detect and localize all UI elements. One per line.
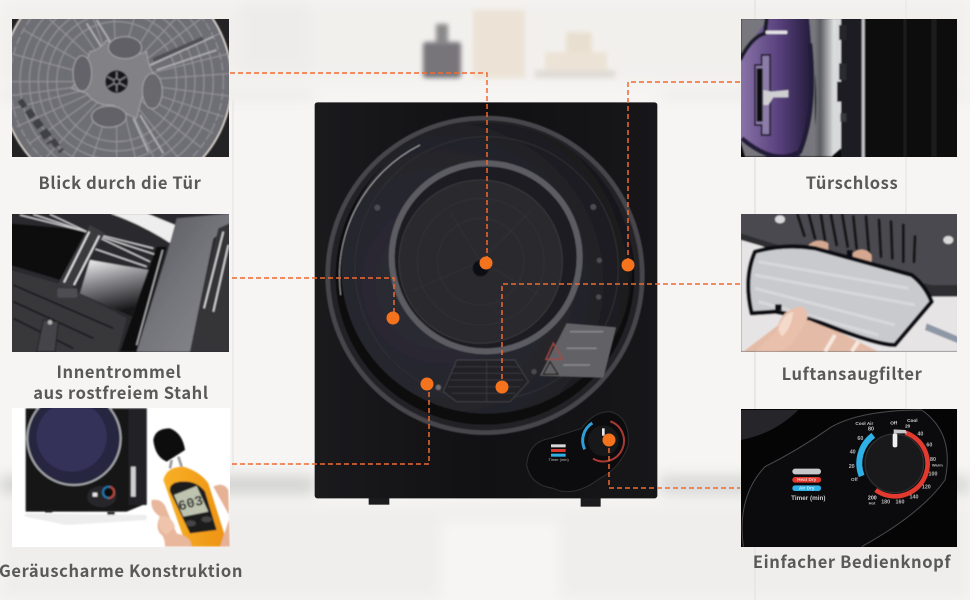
- vent grille: [443, 360, 528, 402]
- photo: control knob close-up: Heat Dry: [797, 477, 817, 482]
- label: Geräuscharme Konstruktion: Geräuscharme Konstruktion: [0, 558, 243, 582]
- warning sticker: [540, 323, 616, 378]
- photo: control knob close-up: 160: [896, 499, 904, 505]
- label: Blick durch die Tür: Blick durch die Tür: [39, 170, 202, 194]
- photo: control knob close-up: Hot: [869, 500, 876, 505]
- photo: control knob close-up: Warm: [932, 463, 943, 468]
- photo: stainless steel drum: [10, 213, 233, 355]
- photo: control knob close-up: 120: [922, 485, 931, 491]
- panel: Geräuscharme Konstruktion: [0, 408, 242, 577]
- leader line: door view: [230, 73, 487, 263]
- photo: door lock: [740, 18, 958, 158]
- photo: control knob close-up: Cool: [907, 418, 918, 423]
- photo: control knob close-up: Cool Air: [855, 421, 873, 426]
- dryer product image: [315, 102, 657, 507]
- orange marker dots: [386, 256, 634, 446]
- panel: Innentrommel aus rostfreiem Stahl: [10, 213, 233, 404]
- leader line: control knob: [609, 440, 740, 488]
- photo: control knob close-up: Off: [851, 477, 858, 482]
- photo: control knob close-up: 20: [849, 464, 855, 470]
- photo: control knob close-up: 180: [881, 499, 890, 505]
- panel: Blick durch die Tür: [12, 19, 229, 189]
- red timer arc: [876, 433, 928, 496]
- photo: drum seen through the door: [12, 19, 229, 157]
- panel: Türschloss: [740, 18, 958, 194]
- photo: control knob close-up: 60: [857, 436, 863, 442]
- photo: control knob close-up: [741, 409, 957, 547]
- panel: Luftansaugfilter: [741, 213, 958, 385]
- dryer body: [315, 102, 657, 498]
- photo: control knob close-up: 60: [926, 443, 932, 449]
- label: Innentrommel aus rostfreiem Stahl: [33, 359, 209, 404]
- inner drum window: [392, 163, 580, 351]
- blue timer arc: [859, 435, 873, 476]
- label: Innentrommel aus rostfreiem Stahl: Innentrommel: [56, 359, 182, 383]
- photo: control knob close-up: 40: [917, 431, 923, 437]
- photo: control knob close-up: 80: [930, 457, 936, 463]
- photo: air intake filter: [741, 213, 958, 352]
- photo: control knob close-up: 80: [868, 427, 874, 433]
- dryer feet: [369, 497, 601, 507]
- photo: dryer and sound level meter: 603: [177, 493, 205, 515]
- photo: control knob close-up: 200: [868, 495, 877, 501]
- dryer door: [325, 116, 645, 435]
- leader line: low noise: [232, 384, 429, 464]
- photo: dryer and sound level meter: [12, 408, 230, 547]
- control panel: Timer (min): [549, 457, 569, 462]
- photo: control knob close-up: 140: [910, 494, 918, 500]
- photo: control knob close-up: Off: [890, 421, 897, 426]
- leader line: inner drum: [232, 278, 394, 318]
- photo: control knob close-up: Timer (min): [791, 495, 826, 502]
- label: Luftansaugfilter: Luftansaugfilter: [782, 361, 923, 385]
- label: Innentrommel aus rostfreiem Stahl: aus rostfreiem Stahl: [33, 380, 209, 404]
- photo: control knob close-up: Air Dry: [799, 485, 815, 490]
- photo: control knob close-up: 20: [905, 423, 911, 428]
- leader line: door lock: [628, 82, 740, 265]
- label: Türschloss: Türschloss: [806, 170, 898, 194]
- photo: control knob close-up: 100: [929, 471, 937, 477]
- photo: control knob close-up: 40: [850, 449, 856, 455]
- panel: Einfacher Bedienknopf: [741, 409, 957, 573]
- control panel: [527, 412, 628, 492]
- leader line: air filter: [502, 284, 740, 387]
- label: Einfacher Bedienknopf: Einfacher Bedienknopf: [753, 549, 951, 573]
